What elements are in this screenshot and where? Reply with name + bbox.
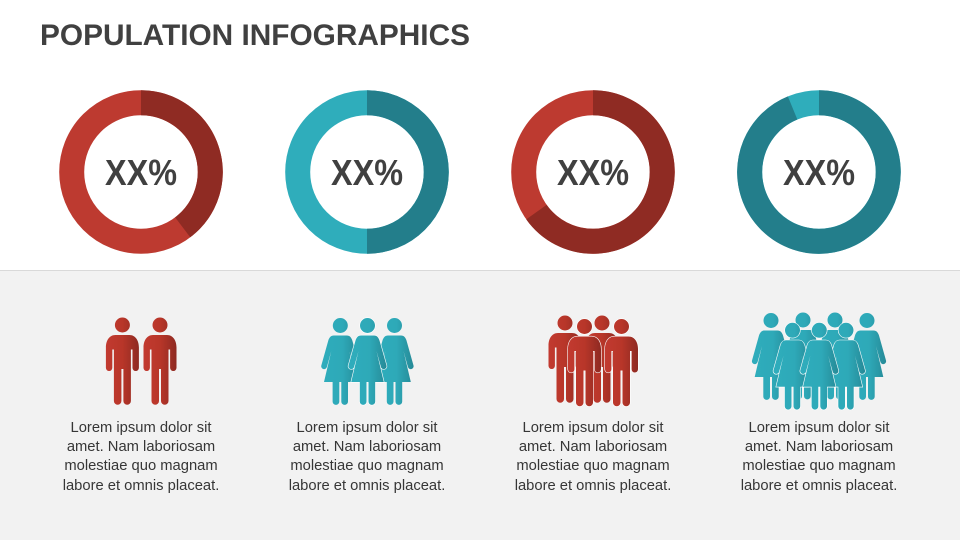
title: POPULATION INFOGRAPHICS [40, 19, 470, 52]
donut chart 4: XX% [783, 152, 855, 193]
text block 4: molestiae quo magnam [742, 458, 896, 474]
icon: seven women [752, 312, 886, 410]
icon: three women [321, 318, 414, 405]
text block 1: Lorem ipsum dolor sit [70, 420, 212, 436]
text block 4: labore et omnis placeat. [741, 478, 897, 494]
text block 4: amet. Nam laboriosam [745, 439, 893, 455]
donut chart 1: XX% [105, 152, 177, 193]
donut chart 2: XX% [331, 152, 403, 193]
text block 3: molestiae quo magnam [516, 458, 670, 474]
text block 3: Lorem ipsum dolor sit [522, 420, 664, 436]
text block 2: molestiae quo magnam [290, 458, 444, 474]
text block 2: amet. Nam laboriosam [293, 439, 441, 455]
donut chart 4 [750, 103, 888, 241]
text block 1: amet. Nam laboriosam [67, 439, 215, 455]
text block 3: amet. Nam laboriosam [519, 439, 667, 455]
text block 2: Lorem ipsum dolor sit [296, 420, 438, 436]
text block 1: molestiae quo magnam [64, 458, 218, 474]
panel: lower background [0, 270, 960, 540]
text block 3: labore et omnis placeat. [515, 478, 671, 494]
text block 1: labore et omnis placeat. [63, 478, 219, 494]
text block 4: Lorem ipsum dolor sit [748, 420, 890, 436]
icon: two men [106, 318, 176, 405]
donut chart 1 [72, 103, 210, 241]
icon: four men [548, 316, 638, 406]
text block 2: labore et omnis placeat. [289, 478, 445, 494]
donut chart 3: XX% [557, 152, 629, 193]
donut chart 3 [524, 103, 662, 241]
donut chart 2 [298, 103, 436, 241]
